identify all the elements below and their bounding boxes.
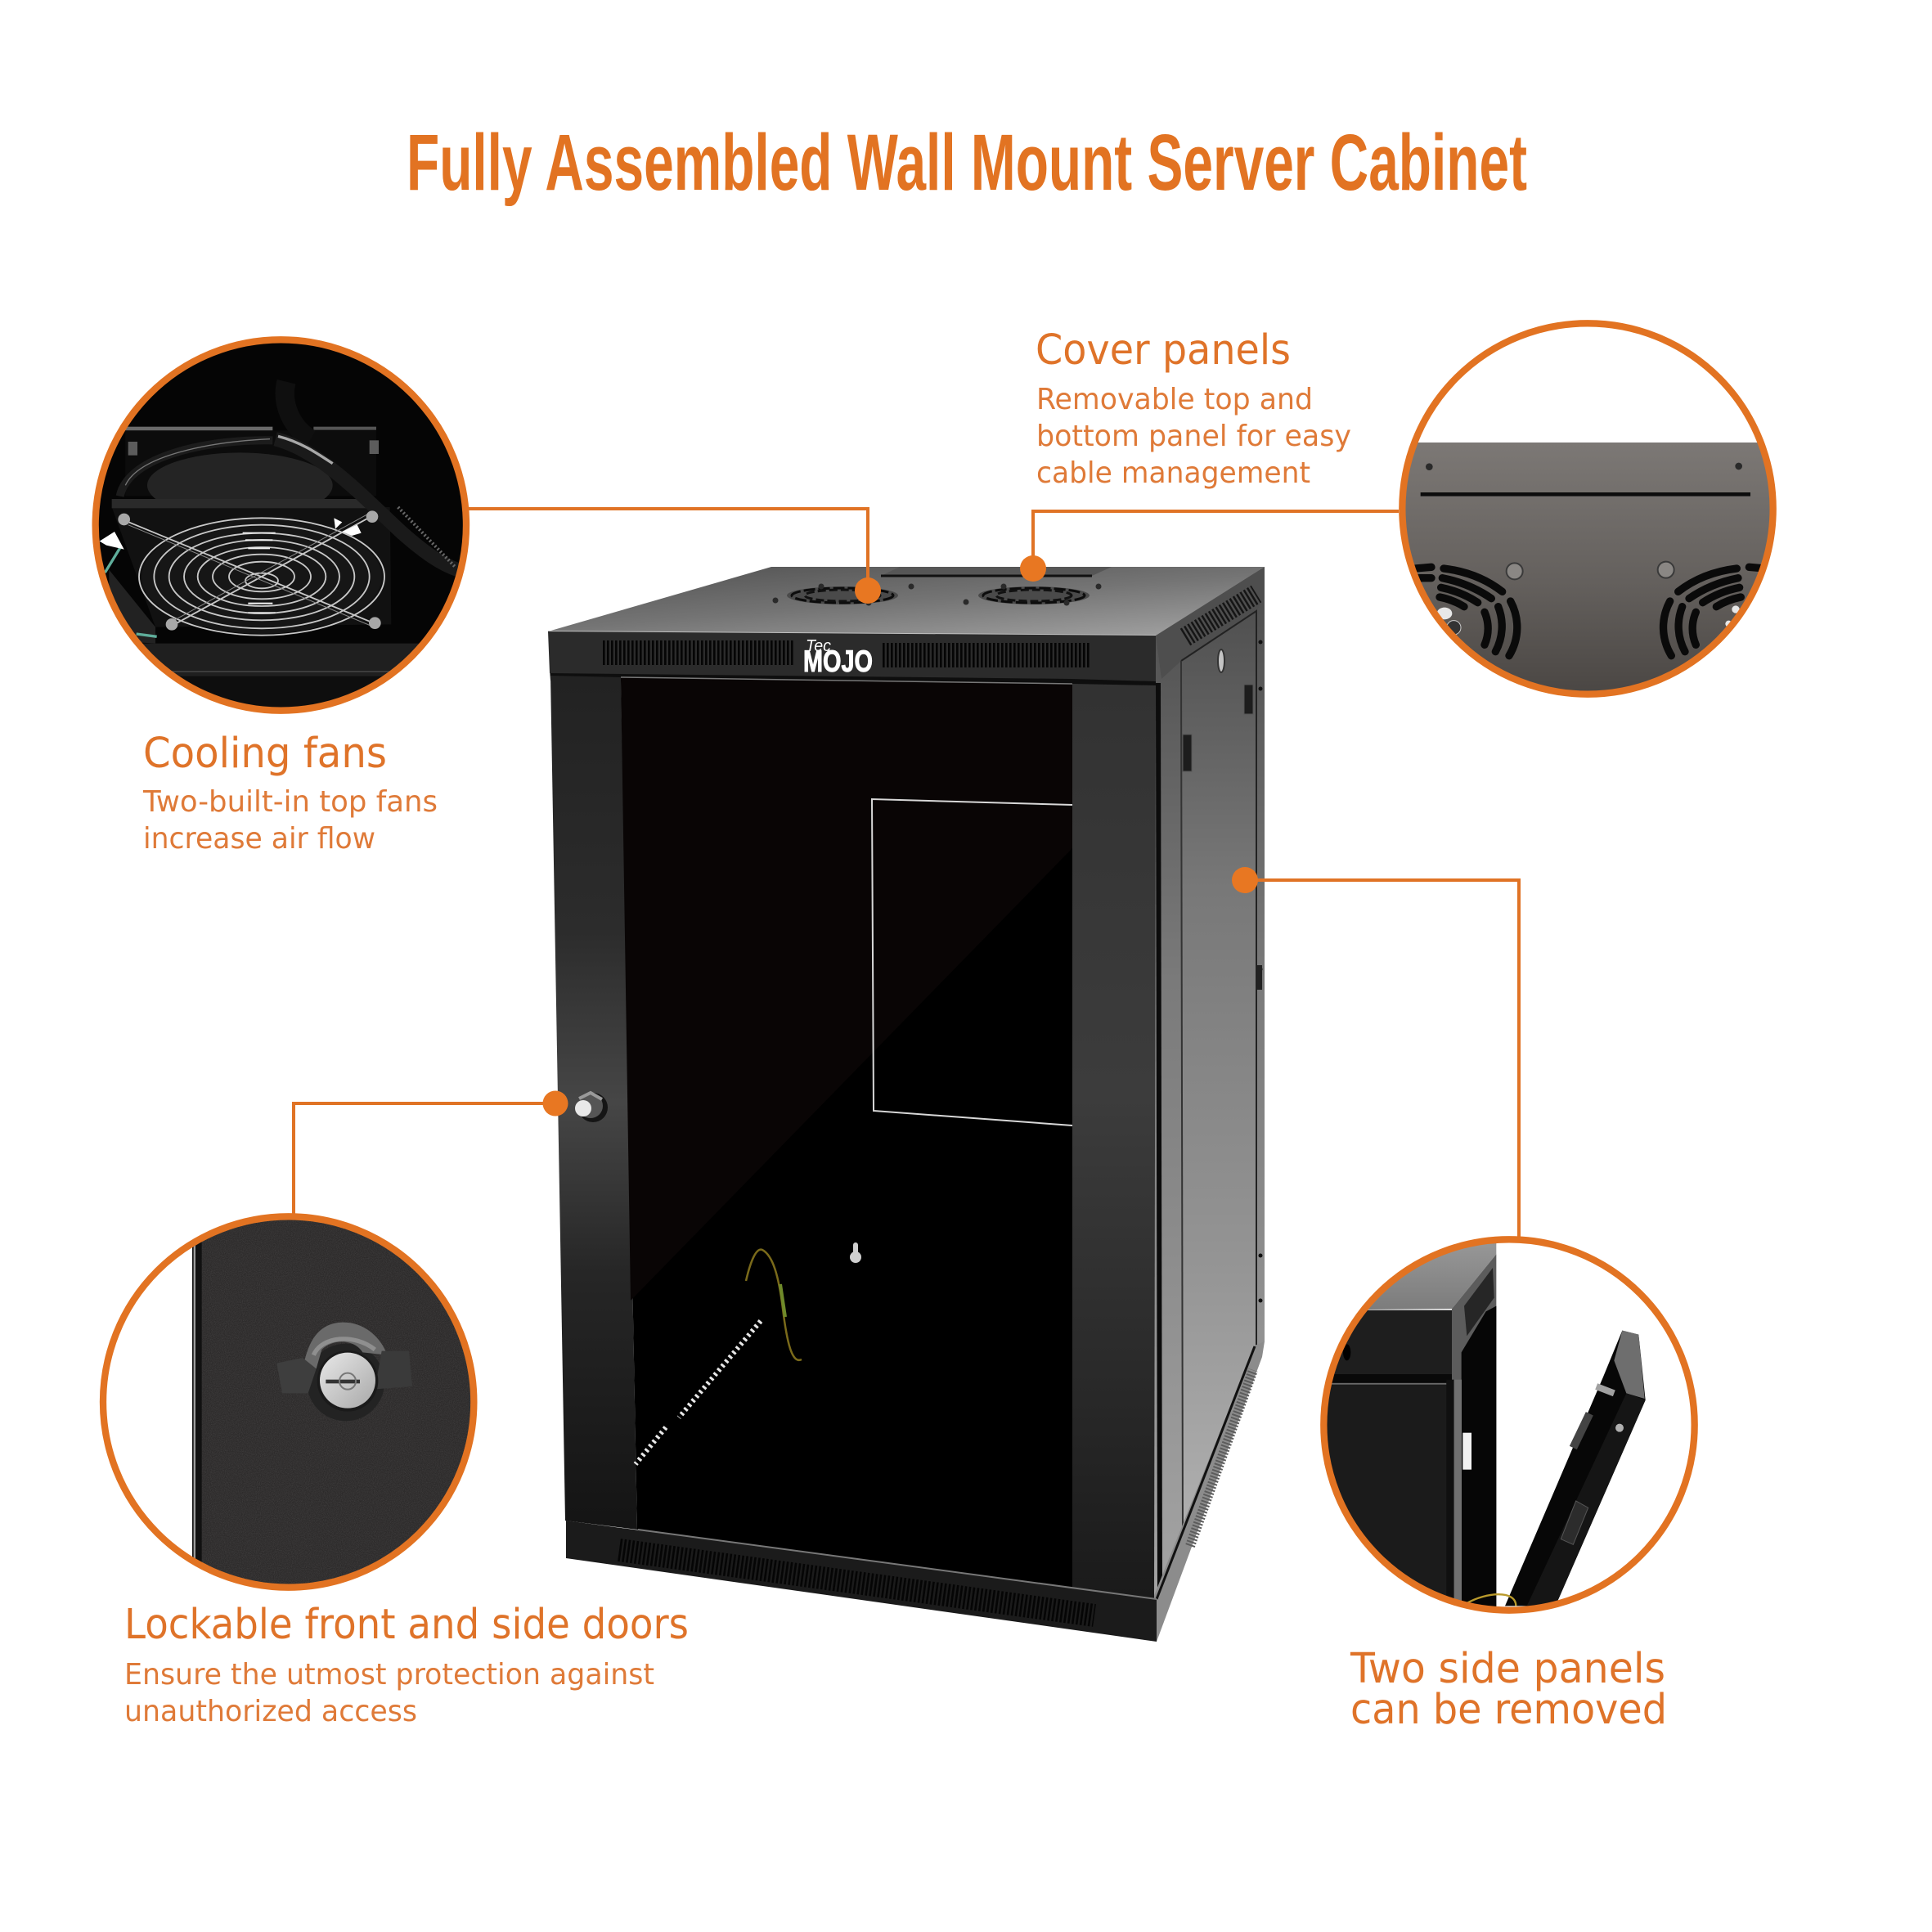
TecMojo logo [803, 637, 873, 678]
text: side panels [1350, 1645, 1667, 1734]
text: lockable doors: unauthorized access [124, 1695, 417, 1728]
front top band with vents [548, 631, 1156, 681]
TecMojo logo: Tec [806, 637, 831, 655]
text: side panels: can be removed [1350, 1686, 1667, 1734]
text: side panels: Two side panels [1350, 1645, 1665, 1693]
front base with vents [566, 1521, 1157, 1642]
text: cover panels: bottom panel for easy [1036, 420, 1351, 453]
door right rail [1072, 684, 1156, 1599]
server cabinet product [548, 567, 1265, 1642]
callout: lock connector [294, 1091, 568, 1215]
door lock [575, 1093, 608, 1122]
TecMojo logo: MOJO [803, 645, 873, 678]
text: cooling fans [142, 730, 438, 856]
text: cooling fans: Two-built-in top fans [142, 785, 438, 819]
detail circle: removable side panel [1317, 1235, 1699, 1617]
detail circle: cooling fan [90, 335, 472, 717]
door glass [621, 677, 1072, 1588]
cabinet base side [1152, 1341, 1265, 1642]
text: cooling fans: Cooling fans [143, 730, 387, 778]
text: cooling fans: increase air flow [143, 822, 375, 856]
callout: cover panels connector [1020, 511, 1399, 582]
door top gap [550, 669, 1156, 689]
text: cover panels: Cover panels [1036, 326, 1291, 375]
detail circle: cover panel [1399, 319, 1781, 701]
door left rail [550, 676, 637, 1530]
infographic canvas [92, 133, 1777, 1724]
callout: side panels connector [1232, 867, 1519, 1238]
text: cover panels [1036, 326, 1351, 490]
keyhole mount [850, 1242, 861, 1263]
callout: cooling fans connector [469, 509, 881, 604]
text: lockable doors [124, 1601, 689, 1728]
cabinet top with fans and cover plate [548, 567, 1265, 636]
text: cover panels: Removable top and [1036, 383, 1313, 416]
text: lockable doors: Ensure the utmost protection against [124, 1658, 654, 1692]
cabinet side panel [1149, 567, 1265, 1602]
detail circle: door lock [98, 1211, 492, 1593]
text: lockable doors: Lockable front and side doors [124, 1601, 689, 1649]
text: cover panels: cable management [1036, 456, 1310, 490]
